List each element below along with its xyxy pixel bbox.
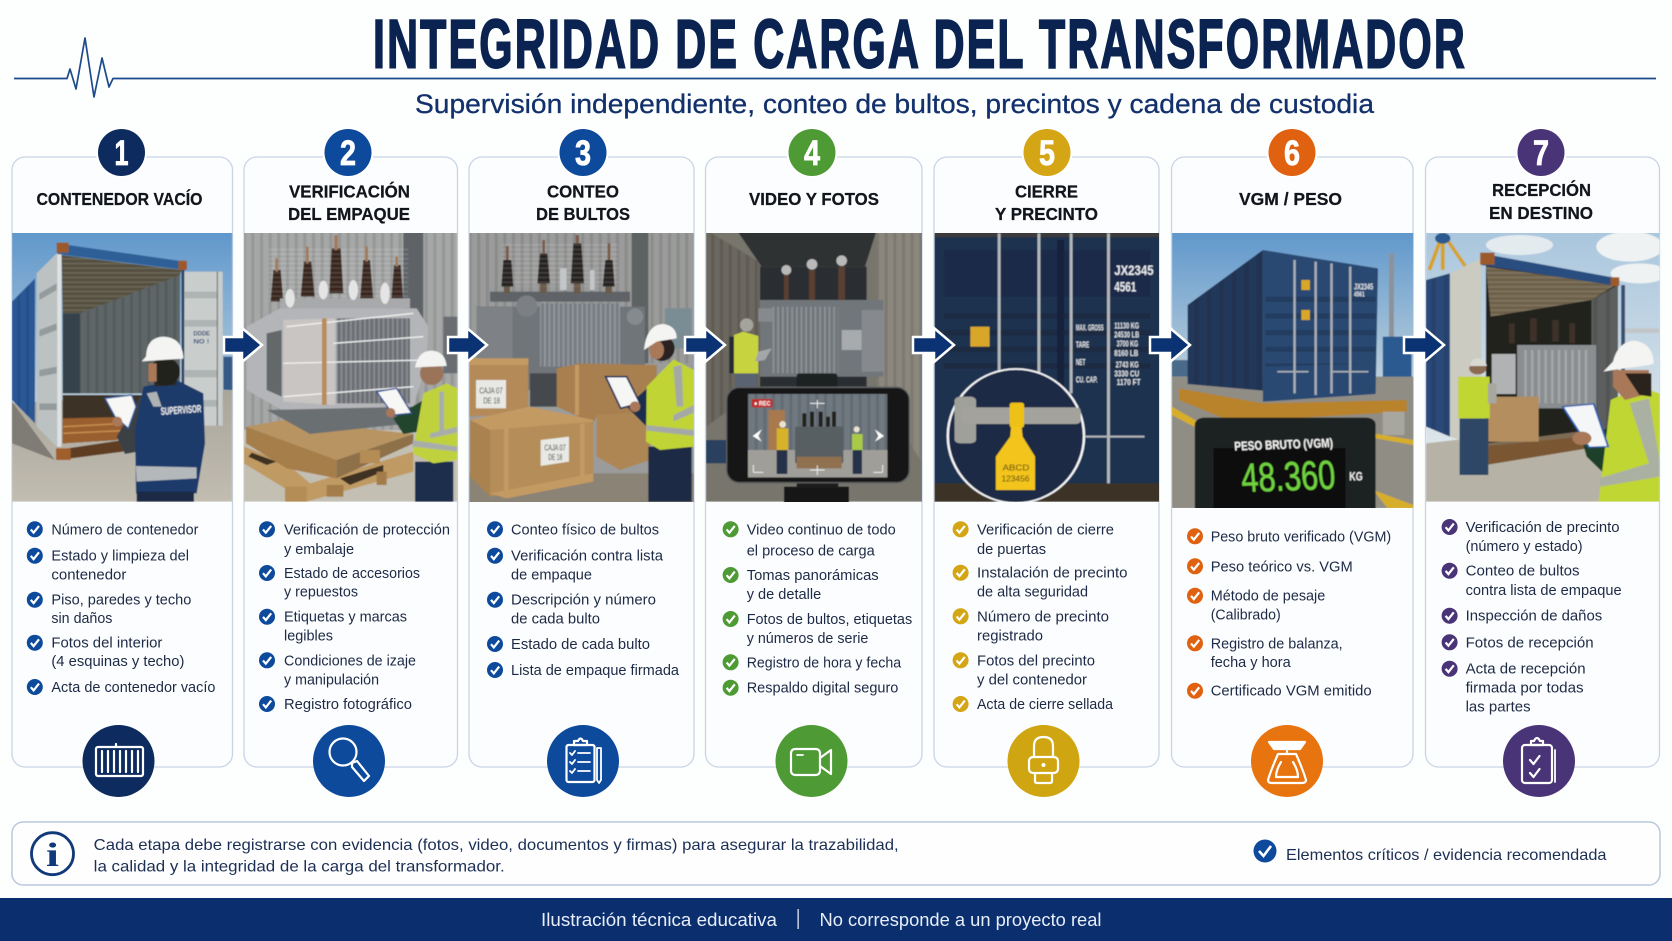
photo: container doors and seal: 2743 KG (1116, 361, 1139, 370)
photo: empty container with supervisor: DDDE (193, 331, 210, 337)
checklist 7: contra lista de empaque (1466, 582, 1622, 599)
badge 6: 6 (1284, 134, 1300, 173)
photo: container doors and seal: 11130 KG (1114, 322, 1139, 331)
checklist 7: las partes (1466, 698, 1531, 715)
badge 7 (1516, 127, 1566, 178)
checklist 3 (487, 521, 680, 679)
checklist 1 (27, 521, 215, 696)
checklist 1: Piso, paredes y techo (51, 592, 191, 609)
checklist 1: Estado y limpieza del (51, 548, 189, 565)
checklist 4: y de detalle (747, 586, 821, 603)
badge 4: 4 (804, 134, 820, 173)
checklist 6: Peso bruto verificado (VGM) (1211, 528, 1391, 545)
photo: empty container with supervisor: NO ! (193, 338, 209, 345)
checklist 4: Video continuo de todo (747, 521, 896, 538)
checklist 3: Lista de empaque firmada (511, 662, 680, 679)
checklist 2: Etiquetas y marcas (284, 609, 407, 626)
photo: container weighing with display: 4561 (1354, 290, 1365, 298)
badge 3: 3 (575, 134, 591, 173)
photo: container doors and seal (934, 230, 1160, 503)
photo: container doors and seal: CU. CAP. (1076, 376, 1098, 385)
checklist 5: Acta de cierre sellada (977, 696, 1114, 713)
icon: padlock (1008, 725, 1080, 797)
checklist 2: Registro fotográfico (284, 696, 412, 713)
checklist 5: Número de precinto (977, 608, 1109, 625)
photo: container weighing with display: JX2345 (1354, 283, 1373, 292)
checklist 1: Acta de contenedor vacío (51, 679, 215, 696)
checklist 6: Registro de balanza, (1211, 635, 1343, 652)
checklist 1: Número de contenedor (51, 521, 198, 538)
photo: reception at destination (1426, 230, 1668, 502)
photo: transformer and crates: CAJA 07 (479, 385, 503, 395)
badge 5: 5 (1039, 134, 1055, 173)
checklist 7 (1442, 519, 1622, 715)
icon: clipboard approved (1503, 725, 1575, 797)
footer: No corresponde a un proyecto real (820, 910, 1102, 930)
checklist 4: Fotos de bultos, etiquetas (747, 611, 912, 628)
photo: container weighing with display: KG (1349, 471, 1363, 484)
arrow 4 to 5 (913, 328, 954, 362)
photo: container doors and seal: 3330 CU (1114, 370, 1139, 379)
checklist 6: fecha y hora (1211, 654, 1291, 671)
checklist 2: Verificación de protección (284, 521, 450, 538)
photo: container doors and seal: 4561 (1114, 278, 1136, 295)
photo: container doors and seal: JX2345 (1114, 262, 1154, 278)
checklist 4 (723, 521, 912, 697)
photo: transformer and crates: DE 18 (483, 395, 500, 405)
checklist 2: Estado de accesorios (284, 565, 420, 582)
heading 6: VGM / PESO (1239, 189, 1342, 209)
checklist 3: Estado de cada bulto (511, 636, 650, 653)
checklist 7: Fotos de recepción (1466, 634, 1594, 651)
panel: step 3 conteo de bultos (469, 127, 694, 797)
heading 7: EN DESTINO (1489, 203, 1593, 223)
checklist 7: Inspección de daños (1466, 608, 1602, 625)
checklist 1: Fotos del interior (51, 635, 162, 652)
checklist 2 (259, 521, 450, 713)
panel: step 6 VGM / peso (1172, 127, 1414, 797)
checklist 1: (4 esquinas y techo) (51, 653, 184, 670)
badge 1: 1 (114, 134, 128, 173)
checklist 4: Registro de hora y fecha (747, 654, 902, 671)
badge 2 (322, 127, 374, 178)
badge 1 (96, 127, 147, 178)
panel: step 1 contenedor vacío (12, 127, 233, 797)
checklist 2: Condiciones de izaje (284, 652, 416, 669)
arrow 3 to 4 (685, 328, 725, 362)
photo: container doors and seal: TARE (1076, 341, 1089, 350)
checklist 5: Fotos del precinto (977, 652, 1095, 669)
footer: Ilustración técnica educativa (541, 910, 778, 930)
heading 2 (288, 180, 410, 224)
heading 2: VERIFICACIÓN (289, 180, 410, 202)
badge 5 (1022, 127, 1072, 178)
photo: container doors and seal: 1170 FT (1117, 379, 1141, 387)
checklist 2: y manipulación (284, 671, 379, 688)
info text (94, 837, 899, 876)
heading 1: CONTENEDOR VACÍO (36, 188, 202, 209)
checklist 4: Tomas panorámicas (747, 567, 879, 584)
heading 5 (995, 182, 1098, 224)
info bar (12, 822, 1660, 885)
icon: info: i (46, 837, 59, 874)
checklist 6 (1187, 528, 1391, 700)
panel: step 7 recepción en destino (1426, 127, 1668, 797)
checklist 7: Conteo de bultos (1466, 563, 1580, 580)
badge 7: 7 (1533, 134, 1549, 173)
checklist 6: Método de pesaje (1211, 588, 1325, 605)
panel: step 2 verificación del empaque (244, 127, 458, 797)
checklist 3: Conteo físico de bultos (511, 521, 659, 538)
subtitle: Supervisión independiente, conteo de bultos, precintos y cadena de custodia (415, 89, 1375, 119)
heading 7 (1489, 179, 1593, 223)
photo: transformer and crates (469, 230, 694, 503)
info text: la calidad y la integridad de la carga del transformador. (94, 858, 505, 876)
badge 2: 2 (340, 134, 356, 173)
checklist 7: firmada por todas (1466, 680, 1584, 697)
arrow 6 to 7 (1404, 328, 1444, 362)
panel: step 4 video y fotos (706, 127, 922, 797)
checklist 2: legibles (284, 627, 333, 644)
checklist 5 (953, 521, 1128, 713)
icon: video camera (776, 725, 848, 797)
photo: recording load with phone: ● REC (754, 400, 771, 407)
photo: container doors and seal: 3700 KG (1117, 340, 1138, 349)
photo: recording load with phone (706, 230, 922, 503)
photo: empty container with supervisor (12, 230, 232, 502)
checklist 3: Verificación contra lista (511, 548, 664, 565)
checklist 3: de empaque (511, 567, 592, 584)
arrow 5 to 6 (1150, 328, 1190, 362)
icon: clipboard checklist (547, 725, 619, 797)
checklist 5: Verificación de cierre (977, 521, 1114, 538)
checklist 7: Verificación de precinto (1466, 519, 1620, 536)
heading 3: CONTEO (547, 182, 619, 202)
checklist 6: (Calibrado) (1211, 607, 1281, 624)
photo: transformer and crates: CAJA 07 (544, 444, 566, 453)
checklist 1: contenedor (51, 566, 126, 583)
heading 2: DEL EMPAQUE (288, 204, 410, 224)
legend (1254, 840, 1607, 864)
legend: Elementos críticos / evidencia recomendada (1286, 847, 1607, 864)
photo: container doors and seal: MAX. GROSS (1076, 324, 1104, 333)
heading 3 (536, 182, 630, 224)
heading 7: RECEPCIÓN (1492, 179, 1591, 200)
checklist 1: sin daños (51, 610, 112, 627)
checklist 3: de cada bulto (511, 611, 600, 628)
header ECG line (14, 38, 1656, 97)
badge 4 (786, 127, 838, 178)
checklist 4: el proceso de carga (747, 542, 875, 559)
photo: container doors and seal: 24530 LB (1114, 331, 1139, 340)
photo: transformer and crates: DE 18 (548, 453, 563, 462)
checklist 2: y repuestos (284, 584, 358, 601)
heading 5: CIERRE (1015, 182, 1078, 202)
arrow 2 to 3 (448, 328, 487, 362)
checklist 4: y números de serie (747, 630, 868, 647)
checklist 5: y del contenedor (977, 671, 1087, 688)
checklist 7: (número y estado) (1466, 538, 1583, 555)
checklist 6: Peso teórico vs. VGM (1211, 558, 1353, 575)
arrow 1 to 2 (224, 328, 262, 362)
panel: step 5 cierre y precinto (934, 127, 1160, 797)
heading 4: VIDEO Y FOTOS (749, 189, 879, 209)
icon: info (32, 833, 74, 875)
icon: scale (1251, 725, 1323, 797)
checklist 5: de puertas (977, 541, 1046, 558)
checklist 2: y embalaje (284, 541, 354, 558)
photo: empty container with supervisor: SUPERVISOR (160, 403, 202, 418)
icon: magnifier (313, 725, 385, 797)
checklist 5: de alta seguridad (977, 583, 1088, 600)
checklist 5: Instalación de precinto (977, 565, 1128, 582)
checklist 5: registrado (977, 627, 1043, 644)
checklist 7: Acta de recepción (1466, 661, 1586, 678)
badge 3 (558, 127, 608, 178)
badge 6 (1266, 127, 1318, 178)
checklist 6: Certificado VGM emitido (1211, 683, 1372, 700)
footer (0, 898, 1672, 941)
photo: container doors and seal: 123456 (1002, 474, 1029, 484)
icon: container (82, 725, 154, 797)
info text: Cada etapa debe registrarse con evidencia (fotos, video, documentos y firmas) para asegurar la trazabilidad, (94, 837, 899, 854)
photo: wrapped transformer on pallets (244, 230, 457, 502)
photo: container doors and seal: 8160 LB (1114, 350, 1138, 358)
photo: container doors and seal: NET (1076, 359, 1085, 367)
checklist 3: Descripción y número (511, 592, 656, 609)
checklist 4: Respaldo digital seguro (747, 680, 898, 697)
heading 5: Y PRECINTO (995, 204, 1098, 224)
photo: container weighing with display (1172, 230, 1414, 514)
photo: container doors and seal: ABCD (1002, 463, 1030, 473)
photo: container weighing with display: PESO BRUTO (VGM) (1234, 437, 1334, 454)
photo: container weighing with display: 48.360 (1239, 452, 1337, 501)
heading 3: DE BULTOS (536, 204, 630, 224)
